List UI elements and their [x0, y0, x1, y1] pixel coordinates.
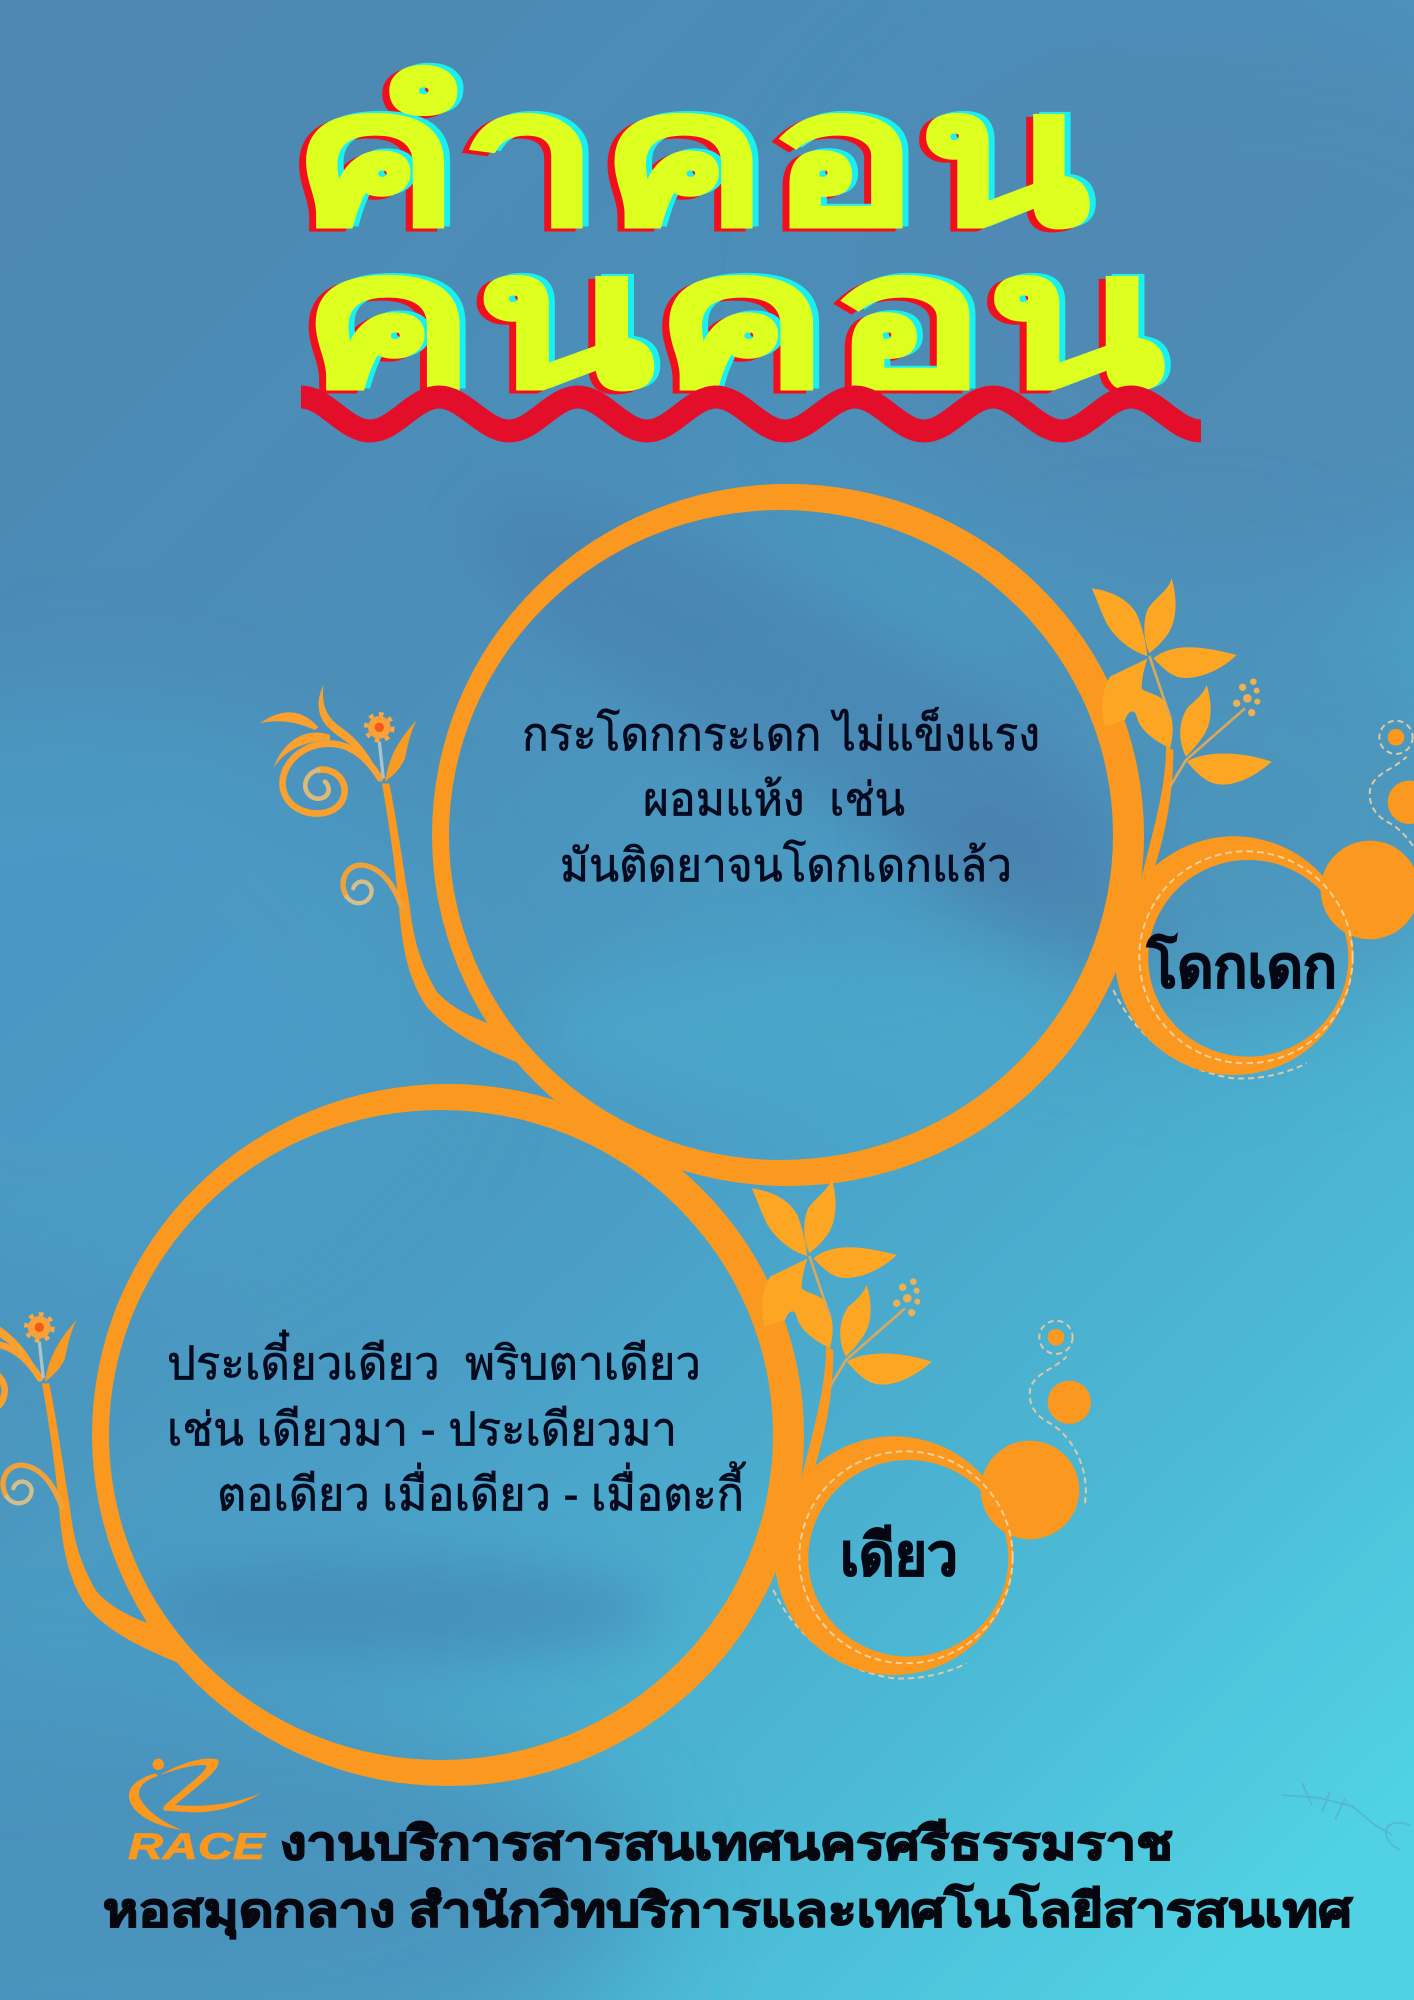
text block: definition of โดกเดก: ผอมแห้ง เช่น [643, 773, 905, 825]
panel: เดียว small crescent ring [775, 1436, 1013, 1675]
panel: โดกเดก small crescent ring [1115, 836, 1353, 1075]
text block: definition of โดกเดก: มันติดยาจนโดกเดกแล้ว [560, 839, 1012, 891]
small spiral [343, 865, 402, 907]
title line 1: คำคอน [292, 53, 1090, 265]
text block: definition of เดียว [167, 1329, 746, 1520]
title line 2 [294, 213, 1171, 430]
footer line 2: หอสมุดกลาง สำนักวิทบริการและเทศโนโลยีสารสนเทศ [103, 1883, 1353, 1939]
red wavy underline [301, 397, 1201, 431]
panel: โดกเดก large ring [432, 484, 1144, 1186]
title line 2: คนคอน [294, 218, 1158, 430]
icon: orange circles and dashed trail lower [773, 1321, 1091, 1679]
icon: right leaf sprig lower [752, 1178, 932, 1483]
title line 2: คนคอน [301, 215, 1165, 427]
text block: definition of โดกเดก [522, 707, 1040, 891]
logo wordmark: RACE: RACE [128, 1826, 267, 1867]
panel: เดียว large ring [92, 1084, 804, 1786]
title: คำคอน คนคอน with red and cyan offset layers [285, 51, 1171, 430]
icon: RACE logo swoosh [129, 1759, 262, 1830]
label: โดกเดก: โดกเดก [1146, 932, 1337, 1000]
icon: orange circles and dashed trail [1113, 721, 1414, 1079]
title line 2: คนคอน [307, 213, 1171, 425]
icon: faint seaweed mark [1282, 1783, 1410, 1850]
text block: definition of เดียว: ตอเดียว เมื่อเดียว - เมื่อตะกี้ [217, 1461, 746, 1520]
title line 1: คำคอน [298, 51, 1096, 263]
footer line 1: งานบริการสารสนเทศนครศรีธรรมราช [280, 1818, 1173, 1869]
branch stem merging into ring [382, 783, 523, 1063]
title line 1: คำคอน [285, 56, 1083, 268]
spiral tendril [283, 744, 380, 814]
icon: left floral branch [260, 685, 523, 1063]
flower [379, 742, 383, 778]
text block: definition of เดียว: เช่น เดียวมา - ประเดียวมา [167, 1403, 677, 1455]
curled leaves [319, 685, 382, 780]
text block: definition of โดกเดก: กระโดกกระเดก ไม่แข็งแรง [522, 707, 1040, 760]
label: เดียว: เดียว [840, 1523, 958, 1588]
icon: right leaf sprig [1092, 578, 1272, 883]
icon: left floral branch lower [0, 1285, 183, 1663]
text block: definition of เดียว: ประเดี๋ยวเดียว พริบตาเดียว [167, 1329, 701, 1389]
side leaf [385, 720, 417, 782]
